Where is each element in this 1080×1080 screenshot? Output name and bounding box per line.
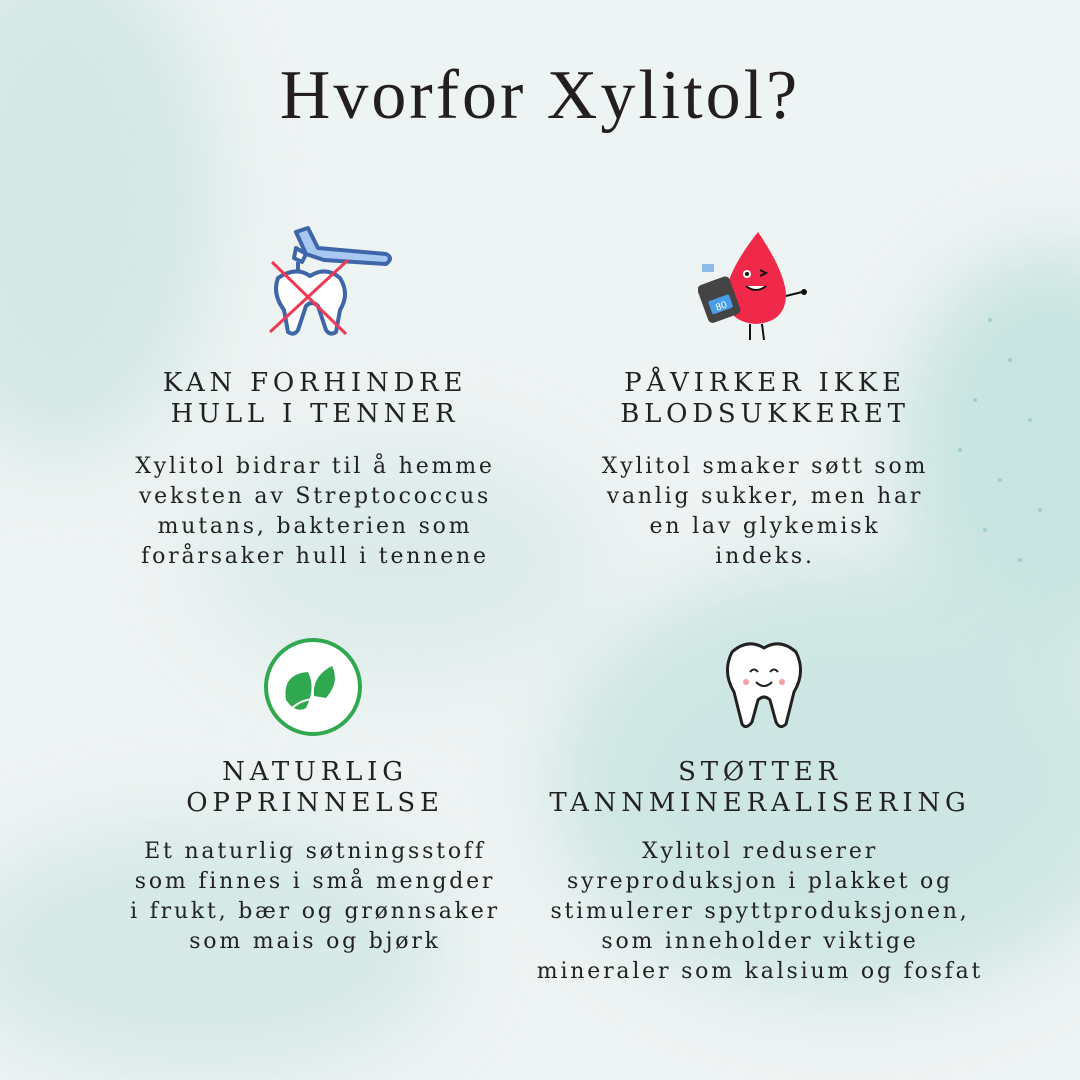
text 3 — [130, 839, 500, 954]
heading 1 — [163, 368, 467, 429]
text 3: i frukt, bær og grønnsaker — [130, 899, 500, 924]
text 2: indeks. — [715, 544, 815, 569]
heading 2 — [620, 366, 910, 429]
text 4: som inneholder viktige — [601, 929, 919, 954]
text 1: veksten av Streptococcus — [139, 484, 491, 509]
heading 4 — [549, 757, 971, 818]
icon: tooth with drill crossed — [269, 226, 392, 336]
text 4: stimulerer spyttproduksjonen, — [550, 899, 970, 924]
text 2: Xylitol smaker søtt som — [602, 454, 928, 479]
text 3: Et naturlig søtningsstoff — [144, 839, 486, 864]
text 4: Xylitol reduserer — [642, 839, 878, 864]
heading 3: NATURLIG — [222, 757, 408, 787]
heading 2: PÅVIRKER IKKE — [624, 368, 906, 398]
text 2: vanlig sukker, men har — [607, 484, 923, 509]
icon: leaf circle — [264, 638, 362, 736]
heading 1: HULL I TENNER — [171, 399, 459, 429]
heading 2: BLODSUKKERET — [620, 399, 910, 429]
text 3: som finnes i små mengder — [135, 869, 495, 894]
text 4 — [537, 839, 983, 984]
text 2: en lav glykemisk — [650, 514, 880, 539]
icon: blood drop: 80 — [714, 299, 729, 314]
text 1: Xylitol bidrar til å hemme — [135, 454, 495, 479]
text 1: forårsaker hull i tennene — [141, 544, 489, 569]
text 1: mutans, bakterien som — [158, 514, 472, 539]
heading 3: OPPRINNELSE — [186, 788, 444, 818]
text 4: syreproduksjon i plakket og — [567, 869, 953, 894]
heading 1: KAN FORHINDRE — [163, 368, 467, 398]
text 4: mineraler som kalsium og fosfat — [537, 959, 983, 984]
heading 3 — [186, 757, 444, 818]
text 1 — [135, 453, 495, 569]
title: Hvorfor Xylitol? — [280, 57, 800, 134]
heading 4: STØTTER — [678, 757, 842, 787]
text 2 — [602, 454, 928, 569]
icon: blood drop — [698, 232, 807, 340]
heading 4: TANNMINERALISERING — [549, 788, 971, 818]
icon: happy tooth — [726, 642, 802, 728]
text 3: som mais og bjørk — [189, 929, 441, 954]
